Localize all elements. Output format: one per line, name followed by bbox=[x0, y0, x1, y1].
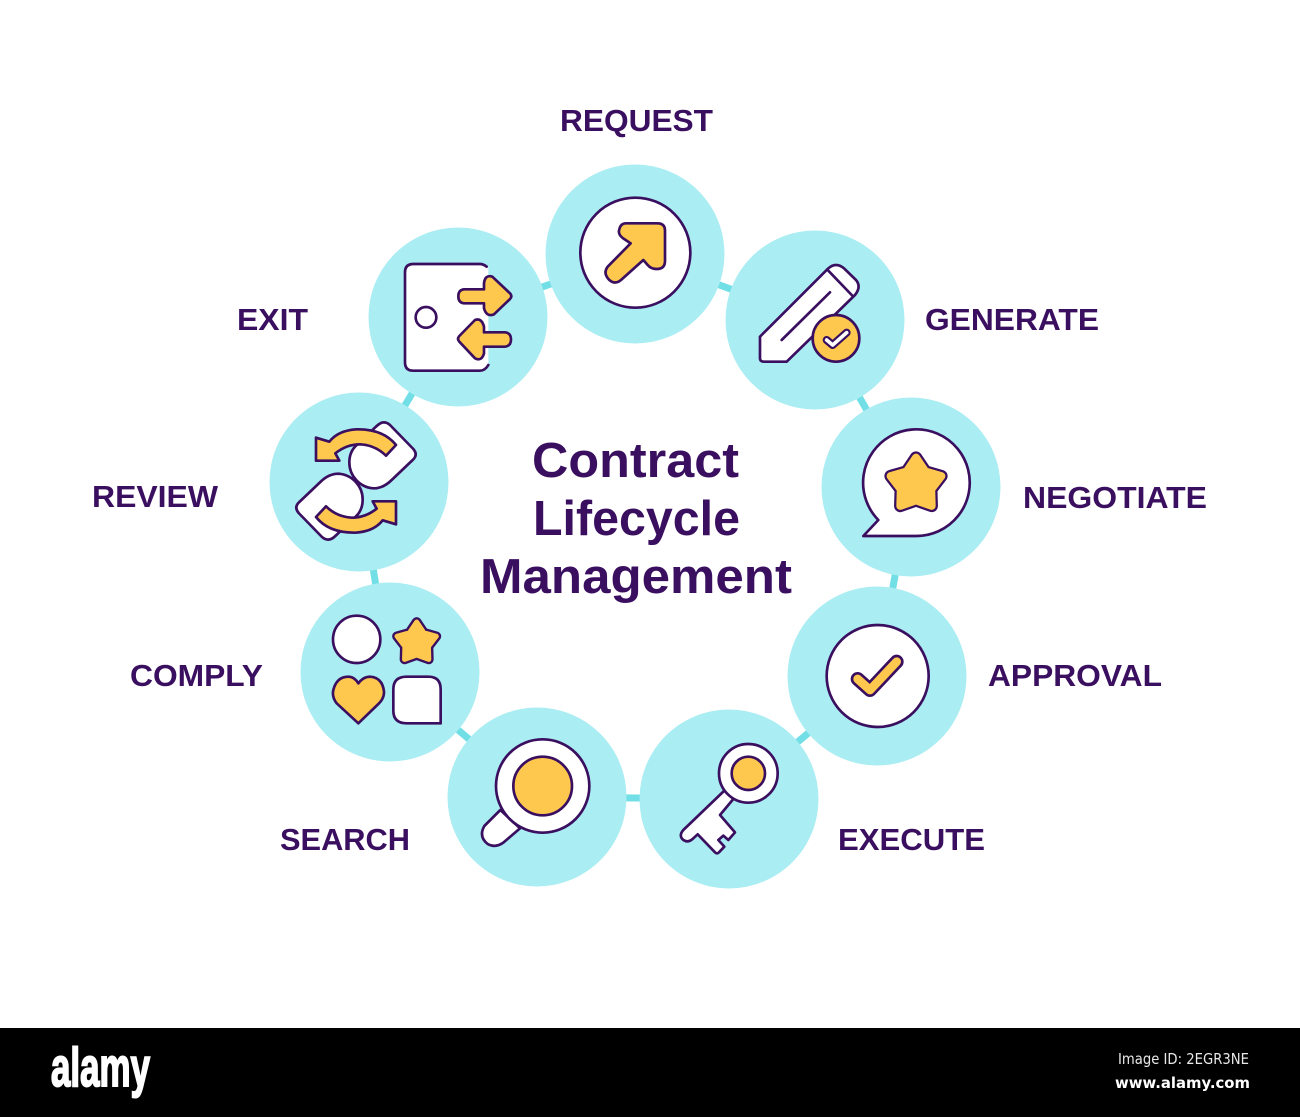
label: exit: EXIT bbox=[237, 302, 308, 337]
icon: arrow in circle bbox=[580, 198, 690, 308]
icon: check mark in circle bbox=[827, 625, 929, 727]
footer url: www.alamy.com bbox=[1115, 1074, 1250, 1092]
panel: comply bbox=[300, 582, 480, 762]
icon: magnifying glass bbox=[482, 739, 589, 846]
footer logo: alamy: alamy bbox=[51, 1036, 150, 1098]
heading: Contract Lifecycle Management: Contract bbox=[532, 434, 739, 488]
panel: search bbox=[448, 708, 626, 886]
icon: speech bubble with star bbox=[863, 429, 970, 536]
heading: Contract Lifecycle Management bbox=[480, 434, 792, 604]
panel: exit bbox=[368, 228, 548, 406]
icon: swap cards with arrows bbox=[296, 422, 416, 540]
label: request: REQUEST bbox=[560, 103, 713, 138]
footer image id: Image ID: 2EGR3NE bbox=[1118, 1050, 1249, 1068]
label: generate: GENERATE bbox=[925, 302, 1099, 337]
label: approval: APPROVAL bbox=[988, 658, 1162, 693]
panel: review bbox=[270, 392, 448, 572]
panel: execute bbox=[640, 710, 818, 888]
heading: Contract Lifecycle Management: Management bbox=[480, 550, 792, 604]
icon: pencil with check badge bbox=[760, 265, 859, 362]
label: search: SEARCH bbox=[280, 822, 410, 857]
heading: Contract Lifecycle Management: Lifecycle bbox=[533, 492, 740, 546]
panel: generate bbox=[726, 230, 904, 410]
panel: approval bbox=[788, 586, 966, 766]
footer bar bbox=[0, 1028, 1300, 1117]
panel: request bbox=[546, 164, 724, 344]
icon: door with arrows bbox=[405, 264, 511, 371]
label: comply: COMPLY bbox=[130, 658, 263, 693]
label: execute: EXECUTE bbox=[838, 822, 985, 857]
icon: key bbox=[681, 744, 778, 853]
label: review: REVIEW bbox=[92, 479, 219, 514]
label: negotiate: NEGOTIATE bbox=[1023, 480, 1207, 515]
icon: shapes grid bbox=[333, 616, 441, 723]
panel: negotiate bbox=[822, 398, 1000, 576]
